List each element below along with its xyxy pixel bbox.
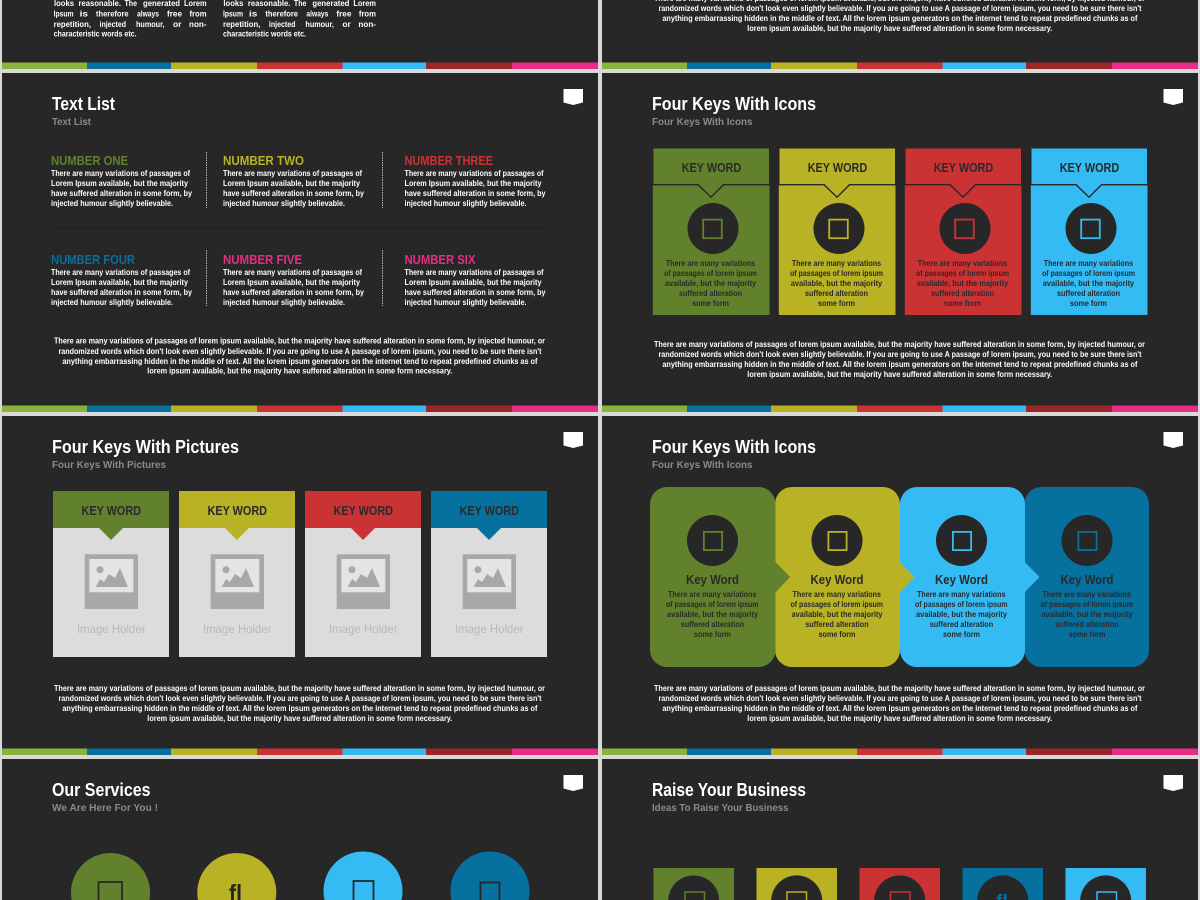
- subtitle: Ideas To Raise Your Business: [652, 802, 789, 814]
- icon: bookmark tab: [1164, 89, 1183, 105]
- item: number three: have suffered alteration in some form, by: [404, 189, 546, 198]
- text column two: free: [336, 10, 352, 18]
- item: number six: NUMBER SIX: [404, 253, 476, 267]
- card: yellow: suffered alteration: [805, 289, 868, 298]
- text column one: therefore: [96, 10, 129, 18]
- title: Four Keys With Icons: [652, 94, 816, 114]
- paragraph: lorem ipsum available, but the majority have suffered alteration in some form necessary.: [747, 714, 1052, 723]
- colour bar: [2, 406, 598, 412]
- item: number four: NUMBER FOUR: [51, 253, 135, 267]
- paragraph: There are many variations of passages of lorem ipsum available, but the majority have suffered alteration in some form, by injected humour, or: [54, 336, 545, 346]
- content: yellow: Key Word: [810, 573, 864, 587]
- card: red: suffered alteration: [931, 289, 994, 298]
- item: number three: [404, 154, 546, 208]
- text column two: or: [342, 20, 351, 29]
- title: Raise Your Business: [652, 780, 806, 800]
- text column two: non-: [358, 20, 376, 29]
- text column two: [223, 0, 376, 38]
- content: yellow: available, but the majority: [792, 610, 883, 619]
- content: sky: suffered alteration: [930, 620, 993, 629]
- card: olive: There are many variations: [666, 259, 756, 268]
- text column two: injected: [269, 20, 295, 29]
- text column two: from: [359, 10, 376, 18]
- paragraph: randomized words which don't look even slightly believable. If you are going to use A passage of lorem ipsum, you need to be sure there isn't: [658, 694, 1142, 703]
- panel: raise your business: [602, 759, 1198, 900]
- card: yellow: some form: [818, 299, 855, 308]
- content: yellow: [790, 515, 883, 639]
- card: yellow: available, but the majority: [791, 279, 883, 288]
- text column two: is: [249, 10, 258, 18]
- item: number two: injected humour slightly believable.: [223, 199, 345, 208]
- content: olive: suffered alteration: [681, 620, 744, 629]
- card: red: of passages of lorem ipsum: [916, 269, 1009, 278]
- card: sky blue: some form: [1070, 299, 1107, 308]
- text column two: Ipsum: [223, 10, 243, 18]
- card: sky blue: suffered alteration: [1057, 289, 1120, 298]
- content: olive: some form: [694, 630, 731, 639]
- item: number five: Lorem Ipsum available, but the majority: [223, 278, 361, 287]
- paragraph: anything embarrassing hidden in the middle of text. All the lorem ipsum generators on the internet tend to repeat predefined chunks as of: [62, 704, 538, 713]
- content: blue: suffered alteration: [1055, 620, 1119, 629]
- card: olive picture: [53, 491, 169, 657]
- paragraph: [54, 684, 545, 723]
- idea tile: sky: [1066, 868, 1146, 900]
- content: blue: Key Word: [1060, 573, 1114, 587]
- card: red: available, but the majority: [917, 279, 1009, 288]
- icon: bookmark tab: [1164, 775, 1183, 791]
- item: number six: There are many variations of passages of: [404, 268, 544, 277]
- content: yellow: some form: [818, 630, 856, 639]
- text column one: or: [173, 20, 181, 29]
- content: yellow: of passages of lorem ipsum: [790, 600, 883, 609]
- paragraph: [654, 340, 1145, 379]
- card: red: KEY WORD: [934, 161, 993, 175]
- item: number six: [404, 253, 546, 307]
- card: red picture: Image Holder: [329, 622, 398, 636]
- paragraph: [654, 0, 1145, 33]
- text column one: always: [137, 10, 159, 18]
- content: sky: There are many variations: [917, 590, 1006, 599]
- text column one: characteristic words etc.: [54, 30, 137, 38]
- content: sky: [915, 515, 1008, 639]
- content: sky: Key Word: [935, 573, 988, 587]
- icon: bookmark tab: [1164, 432, 1183, 448]
- panel: text list: [2, 73, 598, 412]
- item: number two: Lorem Ipsum available, but the majority: [223, 179, 361, 188]
- paragraph: randomized words which don't look even slightly believable. If you are going to use A passage of lorem ipsum, you need to be sure there isn't: [658, 350, 1142, 359]
- item: number two: have suffered alteration in some form, by: [223, 189, 364, 198]
- card: olive: some form: [692, 299, 729, 308]
- content: blue: some form: [1068, 630, 1106, 639]
- text column two: humour,: [305, 20, 334, 29]
- colour bar: [602, 748, 1198, 755]
- card: red picture: KEY WORD: [334, 504, 393, 518]
- item: number six: Lorem Ipsum available, but the majority: [404, 278, 542, 287]
- card: sky blue: available, but the majority: [1043, 279, 1135, 288]
- card: red picture: [305, 491, 421, 657]
- text column two: repetition,: [223, 20, 260, 29]
- card: olive: of passages of lorem ipsum: [664, 269, 757, 278]
- panel: four keys with pictures: [2, 416, 598, 755]
- title: Four Keys With Pictures: [52, 437, 239, 457]
- card: yellow: [779, 148, 896, 315]
- colour bar: [2, 748, 598, 755]
- item: number five: There are many variations of passages of: [223, 268, 362, 277]
- subtitle: Four Keys With Icons: [652, 116, 753, 128]
- subtitle: We Are Here For You !: [52, 802, 158, 814]
- card: sky blue: [1031, 148, 1148, 315]
- colour bar: [2, 62, 598, 69]
- content: sky: available, but the majority: [916, 610, 1008, 619]
- panel: our services: [2, 759, 598, 900]
- card: red: [905, 148, 1022, 315]
- title: Our Services: [52, 780, 150, 800]
- content: olive: available, but the majority: [667, 610, 759, 619]
- card: yellow: KEY WORD: [808, 161, 867, 175]
- content: blue: of passages of lorem ipsum: [1040, 600, 1133, 609]
- service circle: blue: [450, 852, 530, 900]
- paragraph: randomized words which don't look even slightly believable. If you are going to use A passage of lorem ipsum, you need to be sure there isn't: [58, 694, 542, 703]
- card: olive: KEY WORD: [682, 161, 741, 175]
- item: number five: have suffered alteration in some form, by: [223, 288, 364, 297]
- card: yellow: of passages of lorem ipsum: [790, 269, 883, 278]
- paragraph: There are many variations of passages of lorem ipsum available, but the majority have suffered alteration in some form, by injected humour, or: [654, 340, 1145, 349]
- service circle: yellow: [197, 853, 276, 900]
- content: sky: of passages of lorem ipsum: [915, 600, 1008, 609]
- content: olive: of passages of lorem ipsum: [666, 600, 758, 609]
- item: number three: injected humour slightly believable.: [404, 199, 526, 208]
- colour bar: [602, 406, 1198, 412]
- card: sky blue: of passages of lorem ipsum: [1042, 269, 1135, 278]
- paragraph: There are many variations of passages of lorem ipsum available, but the majority have suffered alteration in some form, by injected humour, or: [54, 684, 545, 693]
- item: number four: have suffered alteration in some form, by: [51, 288, 192, 297]
- text column two: characteristic words etc.: [223, 30, 306, 38]
- icon: bookmark tab: [564, 432, 583, 448]
- item: number one: There are many variations of passages of: [51, 169, 190, 178]
- item: number six: injected humour slightly believable.: [404, 298, 526, 307]
- paragraph: lorem ipsum available, but the majority have suffered alteration in some form necessary.: [147, 714, 452, 723]
- shape: yellow block: [775, 487, 914, 667]
- card: olive: available, but the majority: [665, 279, 757, 288]
- card: sky blue: There are many variations: [1044, 259, 1134, 268]
- subtitle: Four Keys With Icons: [652, 459, 753, 471]
- item: number three: Lorem Ipsum available, but the majority: [404, 179, 542, 188]
- idea tile: olive: [654, 868, 734, 900]
- item: number one: NUMBER ONE: [51, 154, 128, 168]
- card: red: some form: [944, 299, 981, 308]
- service circle: olive: [71, 853, 150, 900]
- item: number four: [51, 253, 192, 307]
- panel: four keys with icons: [602, 73, 1198, 412]
- paragraph: lorem ipsum available, but the majority have suffered alteration in some form necessary.: [747, 24, 1052, 33]
- text column one: humour,: [136, 20, 164, 29]
- card: yellow picture: [179, 491, 295, 657]
- idea tile: red: [860, 868, 940, 900]
- card: blue picture: [431, 491, 547, 657]
- shape: blue block: [1024, 487, 1149, 667]
- panel: four keys with icons, arrows: [602, 416, 1198, 755]
- item: number two: There are many variations of passages of: [223, 169, 362, 178]
- item: number three: There are many variations of passages of: [404, 169, 544, 178]
- text column one: [54, 0, 207, 38]
- content: blue: available, but the majority: [1042, 610, 1133, 619]
- subtitle: Text List: [52, 116, 91, 128]
- content: sky: some form: [943, 630, 980, 639]
- shape: sky block: [900, 487, 1040, 667]
- content: blue: [1040, 515, 1133, 639]
- slide: top left fragment: [2, 0, 598, 69]
- slide: top right fragment: [602, 0, 1198, 69]
- paragraph: anything embarrassing hidden in the middle of text. All the lorem ipsum generators on the internet tend to repeat predefined chunks as of: [62, 357, 538, 366]
- shape: olive block: [650, 487, 790, 667]
- card: blue picture: Image Holder: [455, 622, 524, 636]
- item: number five: injected humour slightly believable.: [223, 298, 345, 307]
- text column one: injected: [100, 20, 126, 29]
- item: number two: [223, 154, 364, 208]
- text column one: non-: [189, 20, 207, 29]
- paragraph: randomized words which don't look even slightly believable. If you are going to use A passage of lorem ipsum, you need to be sure there isn't: [658, 4, 1142, 13]
- card: yellow: There are many variations: [792, 259, 882, 268]
- content: olive: There are many variations: [668, 590, 757, 599]
- content: olive: Key Word: [686, 573, 739, 587]
- item: number one: injected humour slightly believable.: [51, 199, 173, 208]
- text column one: Ipsum: [54, 10, 74, 18]
- paragraph: anything embarrassing hidden in the middle of text. All the lorem ipsum generators on the internet tend to repeat predefined chunks as of: [662, 14, 1138, 23]
- card: olive: suffered alteration: [679, 289, 742, 298]
- item: number two: NUMBER TWO: [223, 154, 304, 168]
- item: number five: [223, 253, 364, 307]
- text column two: always: [306, 10, 329, 18]
- text column one: from: [190, 10, 206, 18]
- card: olive picture: KEY WORD: [82, 504, 141, 518]
- service circle: sky: [324, 852, 402, 900]
- paragraph: [654, 684, 1145, 723]
- item: number one: have suffered alteration in some form, by: [51, 189, 192, 198]
- item: number four: injected humour slightly believable.: [51, 298, 173, 307]
- card: yellow picture: KEY WORD: [208, 504, 267, 518]
- item: number one: Lorem Ipsum available, but the majority: [51, 179, 189, 188]
- content: blue: There are many variations: [1042, 590, 1131, 599]
- item: number one: [51, 154, 192, 208]
- paragraph: [54, 336, 545, 376]
- paragraph: lorem ipsum available, but the majority have suffered alteration in some form necessary.: [147, 366, 452, 376]
- idea tile: blue: [962, 868, 1043, 900]
- paragraph: There are many variations of passages of lorem ipsum available, but the majority have suffered alteration in some form, by injected humour, or: [654, 684, 1145, 693]
- item: number four: Lorem Ipsum available, but the majority: [51, 278, 189, 287]
- paragraph: lorem ipsum available, but the majority have suffered alteration in some form necessary.: [747, 370, 1052, 379]
- card: red: There are many variations: [918, 259, 1008, 268]
- idea tile: yellow: [756, 868, 837, 900]
- item: number six: have suffered alteration in some form, by: [404, 288, 546, 297]
- content: yellow: suffered alteration: [805, 620, 869, 629]
- item: number three: NUMBER THREE: [404, 154, 493, 168]
- colour bar: [602, 62, 1198, 69]
- card: sky blue: KEY WORD: [1060, 161, 1119, 175]
- text column one: free: [167, 10, 183, 18]
- content: olive: [666, 515, 759, 639]
- icon: bookmark tab: [564, 775, 583, 791]
- card: yellow picture: Image Holder: [203, 622, 272, 636]
- card: olive: [653, 148, 770, 315]
- text column two: therefore: [265, 10, 299, 18]
- title: Text List: [52, 94, 115, 114]
- icon: bookmark tab: [564, 89, 583, 105]
- subtitle: Four Keys With Pictures: [52, 459, 166, 471]
- paragraph: anything embarrassing hidden in the middle of text. All the lorem ipsum generators on the internet tend to repeat predefined chunks as of: [662, 704, 1138, 713]
- content: yellow: There are many variations: [792, 590, 881, 599]
- title: Four Keys With Icons: [652, 437, 816, 457]
- text column one: repetition,: [54, 20, 91, 29]
- text column one: is: [80, 10, 89, 18]
- paragraph: randomized words which don't look even slightly believable. If you are going to use A passage of lorem ipsum, you need to be sure there isn't: [58, 347, 542, 356]
- paragraph: anything embarrassing hidden in the middle of text. All the lorem ipsum generators on the internet tend to repeat predefined chunks as of: [662, 360, 1138, 369]
- item: number five: NUMBER FIVE: [223, 253, 302, 267]
- item: number four: There are many variations of passages of: [51, 268, 190, 277]
- card: olive picture: Image Holder: [77, 622, 146, 636]
- card: blue picture: KEY WORD: [460, 504, 519, 518]
